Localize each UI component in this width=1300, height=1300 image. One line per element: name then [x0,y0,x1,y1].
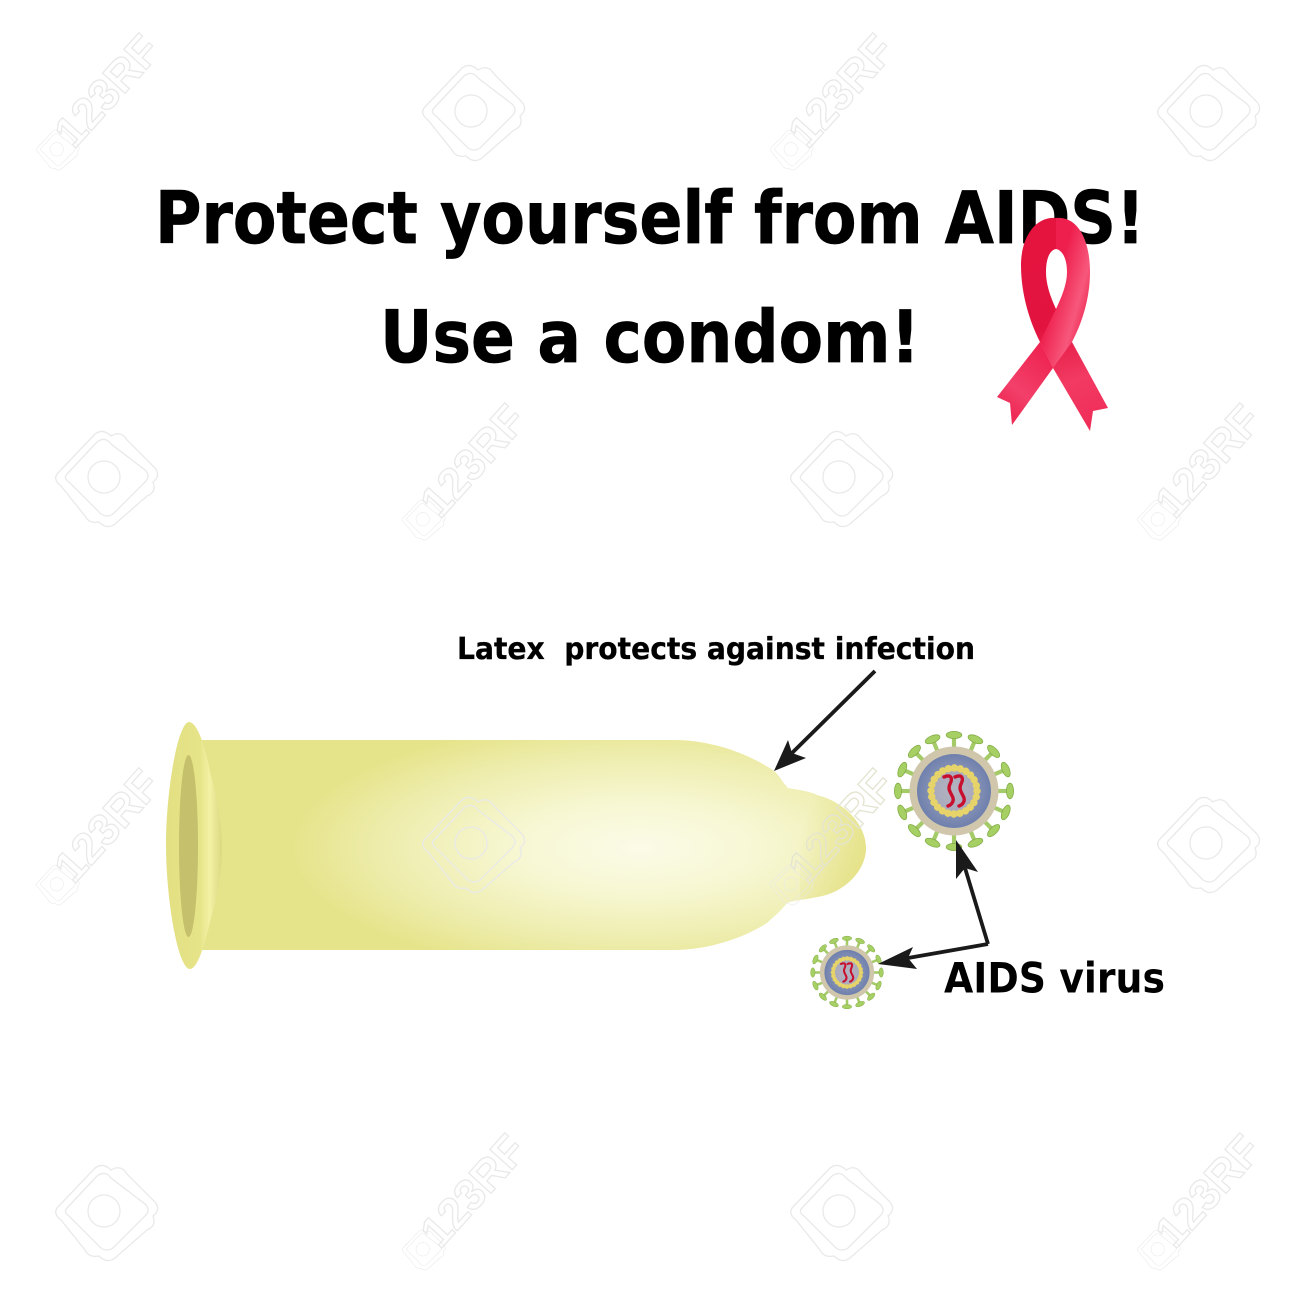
watermarks: 123RF [779,26,904,157]
watermarks over condom [423,761,904,905]
watermarks: 123RF [411,396,536,527]
label: latex: Latex protects against infection [457,632,975,667]
condom tip shading [800,790,866,900]
watermarks: 123RF [1146,1126,1271,1257]
icon: red ribbon [997,218,1108,431]
title [155,176,1145,379]
title: Protect yourself from AIDS! [155,176,1145,260]
arrow: latex [774,671,875,771]
icon: large virus [894,731,1014,851]
watermarks over condom: 123RF [779,761,904,892]
condom opening [179,755,198,937]
watermarks: 123RF [1146,396,1271,527]
watermarks: 123RF [45,26,170,157]
icon: small virus [811,936,883,1009]
label: AIDS virus: AIDS virus [944,954,1165,1002]
condom [166,722,866,969]
condom rim [166,722,222,969]
arrows: AIDS virus [878,840,988,969]
watermarks: 123RF [411,1126,536,1257]
condom body [200,740,866,950]
watermarks: 123RF [45,761,170,892]
title: Use a condom! [380,295,920,379]
